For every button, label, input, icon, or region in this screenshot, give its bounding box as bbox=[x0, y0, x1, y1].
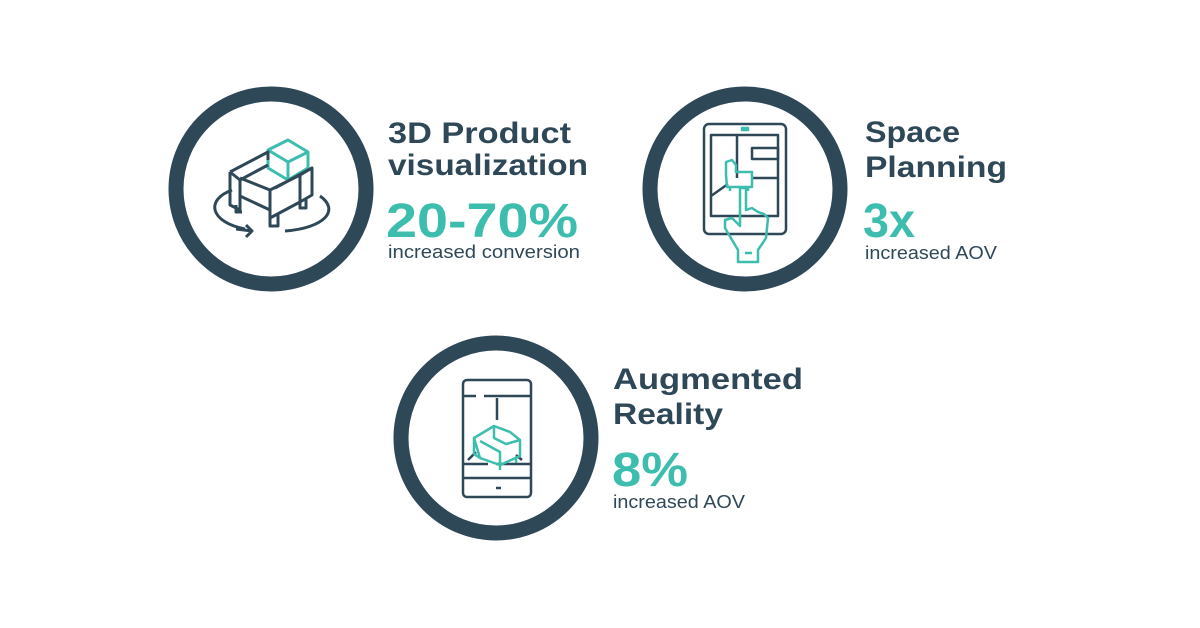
icon: phone with AR chair bbox=[463, 380, 531, 497]
panel: 3D product visualization bbox=[176, 94, 588, 284]
icon ring 3 bbox=[401, 343, 591, 533]
caption: increased conversion: increased conversion bbox=[388, 242, 580, 262]
stat: 3x: 3x bbox=[863, 195, 915, 248]
stat: 8%: 8% bbox=[612, 444, 688, 497]
icon: armchair rotating bbox=[215, 140, 329, 237]
heading: 3D Product visualization: visualization bbox=[388, 149, 588, 182]
panel: Space Planning bbox=[650, 94, 1007, 284]
stat: 20-70%: 20-70% bbox=[386, 195, 578, 248]
heading: Space Planning bbox=[865, 116, 1007, 184]
panel: Augmented Reality bbox=[401, 343, 803, 533]
heading: Augmented Reality bbox=[613, 363, 803, 431]
heading: 3D Product visualization bbox=[388, 117, 588, 182]
heading: Augmented Reality: Augmented bbox=[613, 363, 803, 396]
caption: increased AOV: increased AOV bbox=[613, 492, 745, 512]
caption: increased AOV: increased AOV bbox=[865, 243, 997, 263]
icon ring 1 bbox=[176, 94, 366, 284]
icon: tablet with hand bbox=[704, 124, 786, 262]
heading: Augmented Reality: Reality bbox=[613, 398, 723, 431]
heading: Space Planning: Space bbox=[865, 116, 960, 149]
heading: 3D Product visualization: 3D Product bbox=[388, 117, 571, 150]
heading: Space Planning: Planning bbox=[865, 151, 1007, 184]
icon ring 2 bbox=[650, 94, 840, 284]
